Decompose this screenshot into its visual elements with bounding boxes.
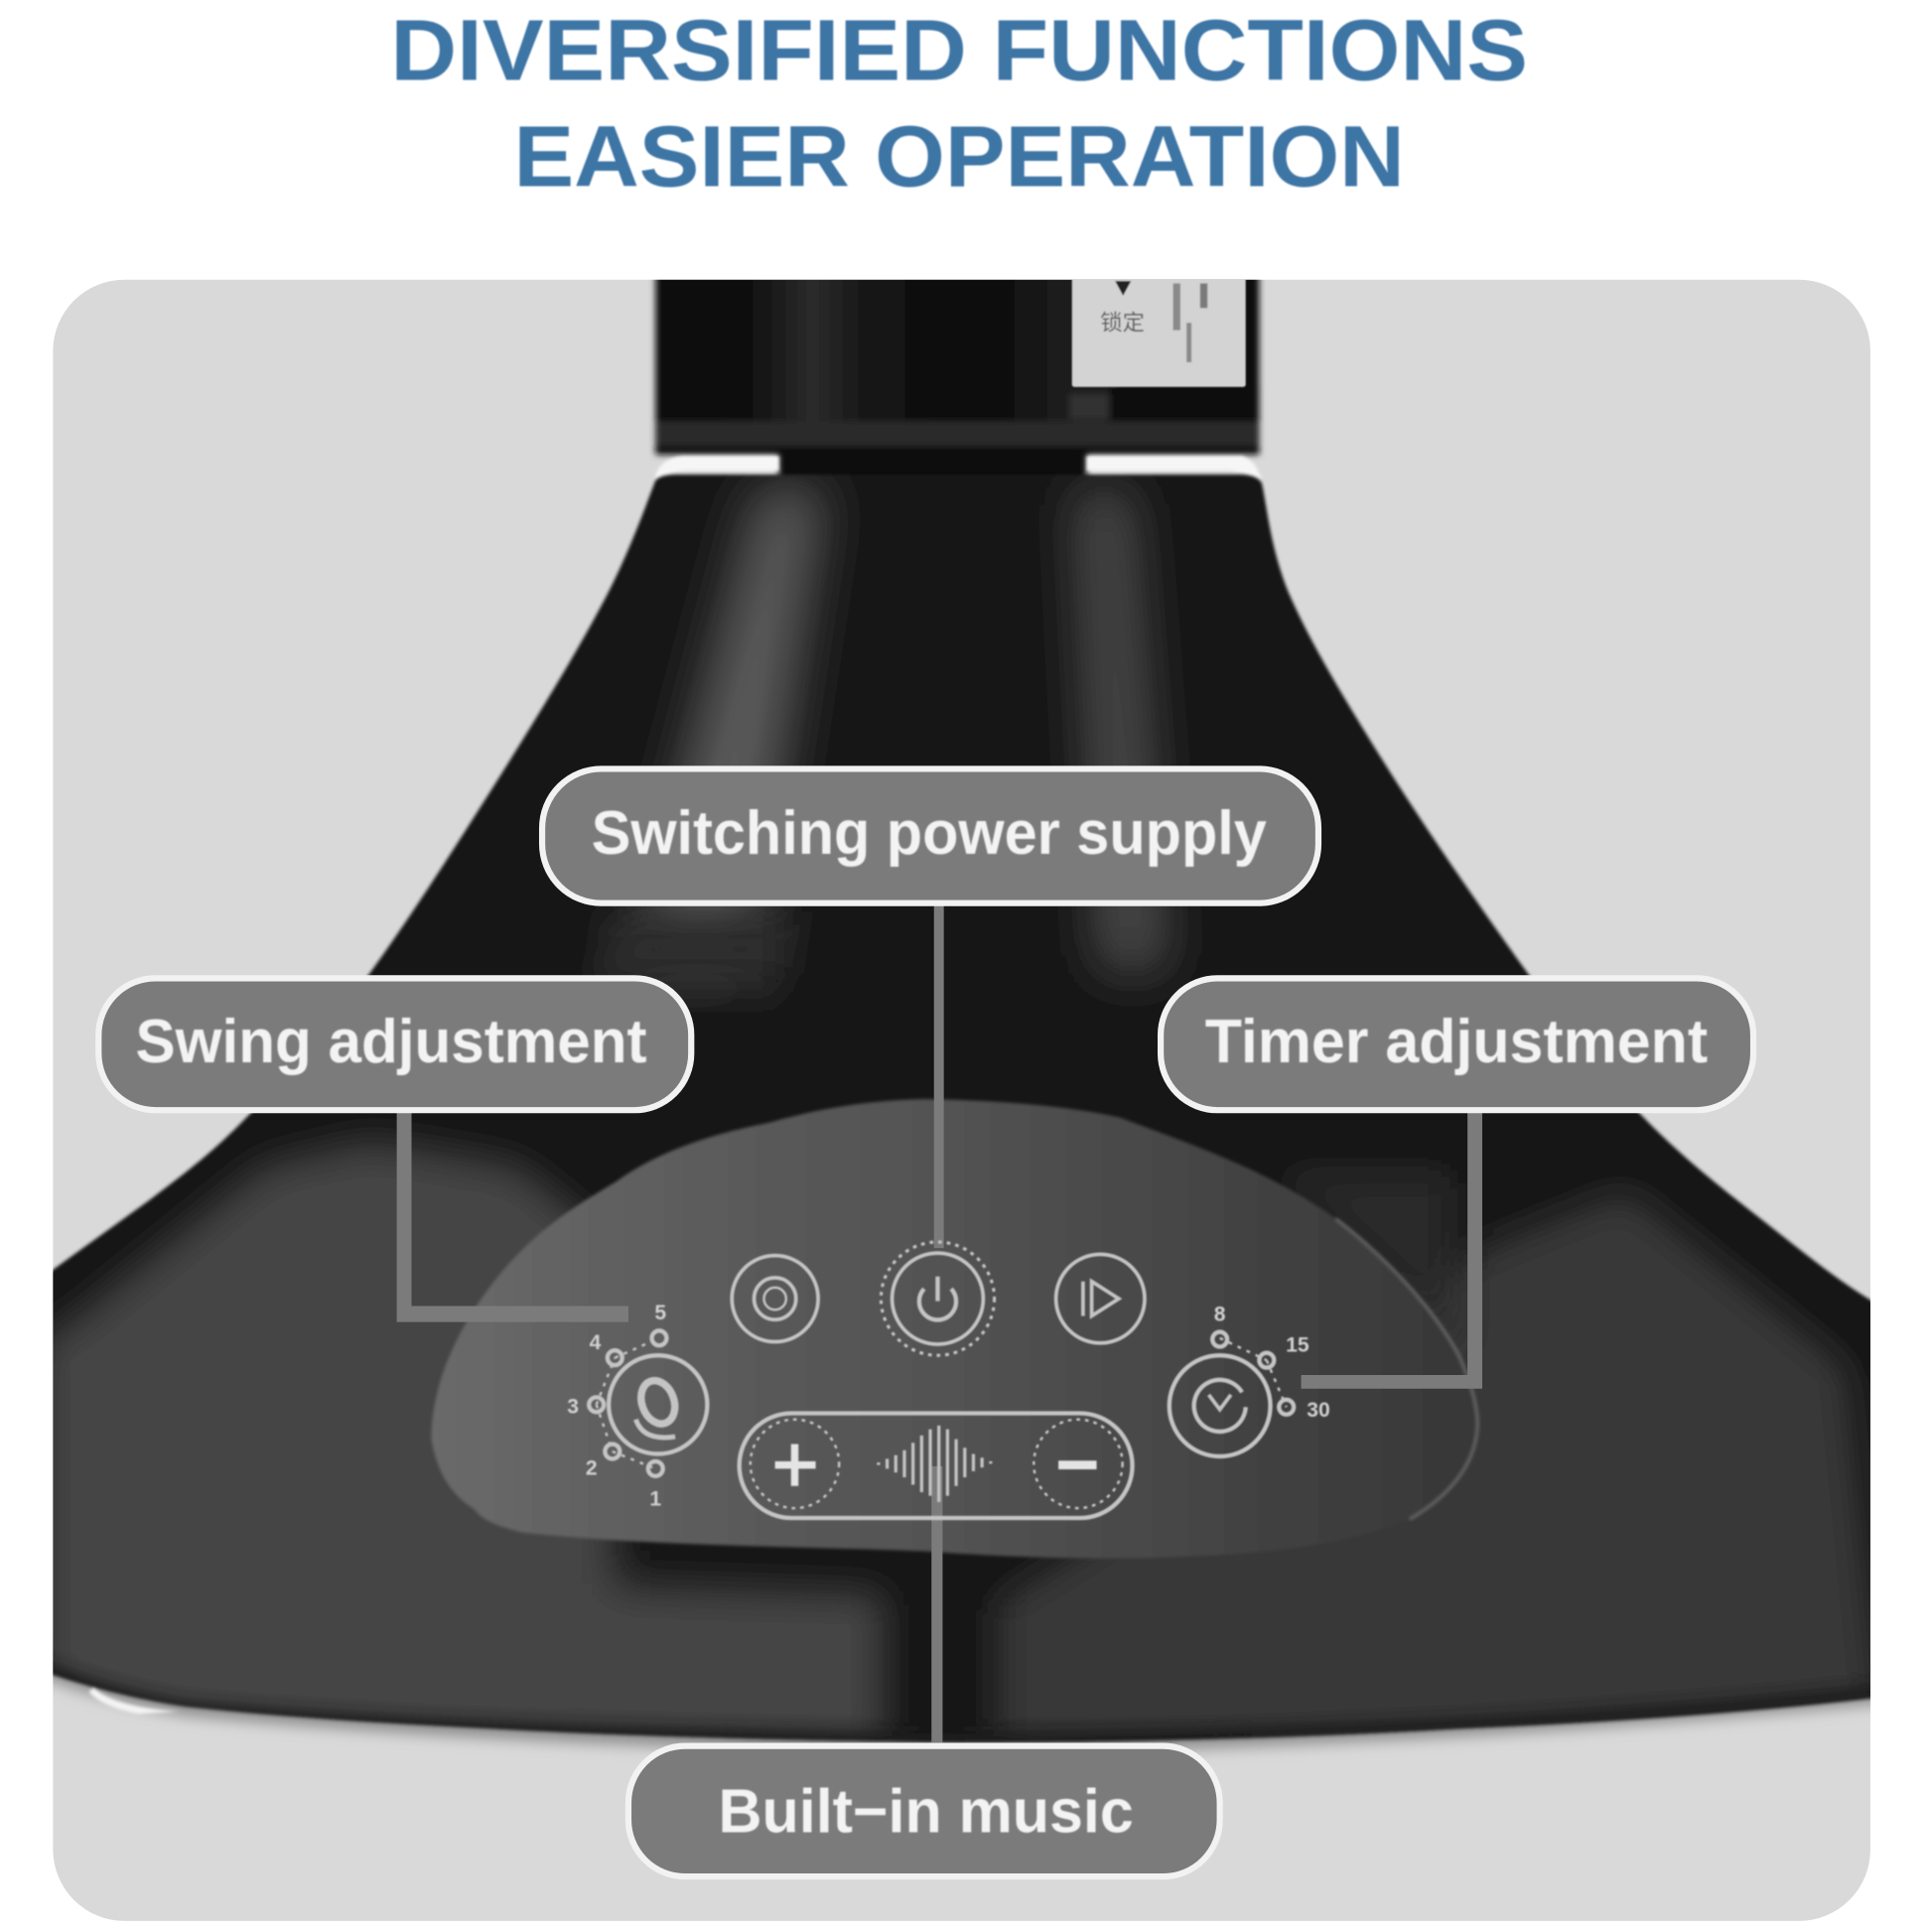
- control icons: [589, 1242, 1294, 1518]
- dial numbers: 5: [654, 1302, 666, 1324]
- dial numbers: 8: [1214, 1303, 1226, 1325]
- dial numbers: 2: [586, 1457, 598, 1480]
- callout: built-in music: [628, 1746, 1220, 1876]
- fan neck: [655, 265, 1259, 483]
- white gaps under neck: [655, 456, 778, 481]
- icon: swing dial: [589, 1330, 707, 1476]
- neck sticker: [1072, 265, 1246, 387]
- gap between pad and right line: [1296, 1167, 1460, 1316]
- callout: built-in music: Built−in music: [719, 1777, 1134, 1846]
- neck sticker: 锁定: [1100, 311, 1145, 336]
- title: [390, 3, 1528, 205]
- floor shadow: [37, 1651, 1885, 1754]
- foot highlight: [88, 1688, 180, 1714]
- dial numbers: 1: [649, 1488, 661, 1511]
- callout: switching power supply: Switching power supply: [592, 799, 1267, 868]
- foot lower dark rim: [54, 1659, 1870, 1743]
- dial numbers: 30: [1307, 1399, 1330, 1422]
- dial numbers: 15: [1286, 1333, 1310, 1356]
- icon: power button: [881, 1242, 995, 1355]
- title: EASIER OPERATION: [514, 108, 1405, 205]
- control pad: [431, 1099, 1477, 1559]
- icon: play button: [1056, 1254, 1145, 1343]
- dial numbers: 3: [567, 1396, 579, 1419]
- callout: switching power supply: [542, 768, 1318, 903]
- title: DIVERSIFIED FUNCTIONS: [390, 3, 1528, 99]
- icon: timer dial: [1170, 1332, 1294, 1456]
- product: fan stand: [25, 265, 1897, 1762]
- left foot tone: [37, 1140, 885, 1749]
- callout: swing adjustment: Swing adjustment: [136, 1008, 647, 1076]
- dial numbers: [567, 1302, 1330, 1511]
- right foot tone: [996, 1189, 1885, 1749]
- callout: timer adjustment: [1161, 978, 1753, 1110]
- panel: product photo background: [53, 280, 1870, 1921]
- dial numbers: 4: [590, 1331, 602, 1354]
- cone highlight bands: [628, 486, 826, 973]
- icon: mode button: [732, 1256, 818, 1342]
- callout: timer adjustment: Timer adjustment: [1205, 1008, 1708, 1076]
- fan base cone and foot: [25, 469, 1897, 1762]
- callout: swing adjustment: [98, 978, 691, 1110]
- icon: volume control capsule: [740, 1414, 1133, 1518]
- connector lines: [397, 903, 1482, 1747]
